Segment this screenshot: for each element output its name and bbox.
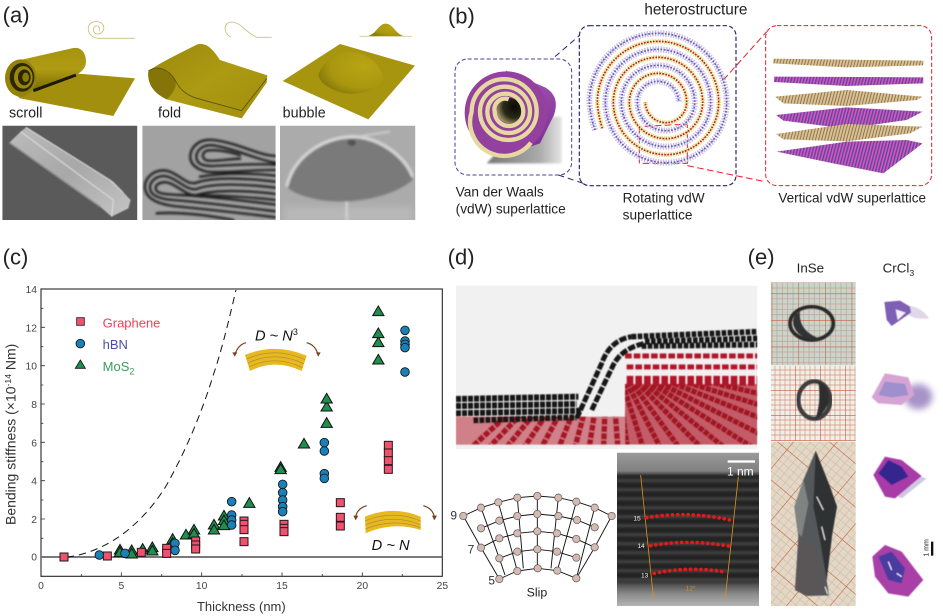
panel (c): bending stiffness chart bbox=[3, 244, 448, 614]
data: MoS2 triangles bbox=[114, 306, 384, 558]
photo: InSe shard on grid bbox=[771, 442, 856, 606]
y axis tick labels: 10 bbox=[25, 362, 37, 373]
y axis tick labels: 8 bbox=[31, 400, 37, 411]
photo: InSe ring on grid bbox=[771, 282, 856, 365]
caption: rotating vdW superlattice: superlattice bbox=[623, 207, 693, 222]
red base layer bbox=[456, 416, 626, 446]
black ramp bbox=[577, 337, 645, 418]
y axis title: Nm) bbox=[3, 344, 19, 374]
3D model: scroll bbox=[5, 48, 135, 116]
illustration: vertical stacked layers bbox=[773, 59, 923, 173]
legend: MoS2 bbox=[75, 359, 134, 376]
photo: TEM of fold bbox=[142, 126, 276, 220]
scale bar: 1 mm: 1 mm bbox=[923, 539, 930, 557]
lattice bonds bbox=[463, 496, 612, 579]
icon: scroll profile bbox=[88, 22, 135, 38]
legend: graphene: Graphene bbox=[103, 315, 160, 330]
panel (a): scroll, fold, bubble bbox=[2, 3, 415, 223]
caption: rotating vdW superlattice bbox=[623, 190, 705, 222]
crystal: CrCl3 sample 4 bbox=[872, 545, 923, 597]
column heading: CrCl3: 3 bbox=[909, 268, 914, 278]
label (d): (d) bbox=[448, 244, 475, 269]
3D model: bubble bbox=[283, 44, 415, 119]
y axis tick labels: 6 bbox=[31, 438, 37, 449]
connector: blue dashes between first and second box bbox=[555, 35, 583, 183]
caption: vertical vdW superlattice: Vertical vdW superlattice bbox=[778, 190, 926, 205]
x axis tick labels: 20 bbox=[357, 581, 368, 592]
black flat layers bbox=[456, 397, 582, 420]
scale bar label: 1 nm bbox=[727, 464, 754, 478]
illustration: rolled superlattice bbox=[465, 71, 562, 163]
photo: InSe loop on grid bbox=[771, 366, 856, 441]
diagram: slip lattice bbox=[450, 492, 615, 600]
layer numbers: 7 bbox=[468, 543, 475, 557]
y axis tick labels: 12 bbox=[25, 323, 37, 334]
red atom rows bbox=[647, 515, 730, 573]
red block fan bbox=[624, 383, 758, 446]
annotation: D ~ N with bent band bbox=[353, 506, 437, 554]
caption: van der Waals superlattice: (vdW) superlattice bbox=[456, 201, 566, 216]
purple-blue layer spiral bbox=[589, 33, 727, 163]
photo: SEM of bubble bbox=[280, 126, 415, 223]
caption: fold: fold bbox=[158, 105, 181, 121]
y axis title: Bending stiffness (×10 bbox=[3, 386, 19, 525]
label (c): (c) bbox=[3, 244, 28, 269]
red-yellow layer spiral bbox=[597, 41, 719, 155]
y axis tick labels bbox=[25, 285, 37, 564]
dashed curve: cubic scaling bbox=[67, 290, 236, 557]
x axis tick labels: 15 bbox=[276, 581, 288, 592]
dashed box: vdW superlattice bbox=[455, 59, 572, 175]
plot frame and ticks bbox=[41, 289, 442, 576]
connector: red dashes and selection region bbox=[639, 32, 767, 182]
dashed box: vertical superlattice bbox=[766, 26, 932, 186]
dashed box: rotating superlattice bbox=[579, 26, 736, 186]
3D model: fold bbox=[148, 44, 267, 118]
row numbers: 13 bbox=[641, 572, 649, 579]
illustration: rotating vdW spiral bbox=[589, 33, 727, 163]
crystal: CrCl3 sample 1 bbox=[884, 301, 929, 326]
caption: van der Waals superlattice bbox=[456, 185, 566, 216]
label (a): (a) bbox=[3, 3, 30, 28]
y axis title: -14 bbox=[3, 374, 13, 386]
caption: slip: Slip bbox=[527, 586, 547, 600]
y axis tick labels: 4 bbox=[31, 477, 37, 488]
red upper rows bbox=[625, 356, 757, 383]
x axis tick labels: 10 bbox=[196, 581, 208, 592]
panel (d): slip in layered materials bbox=[448, 244, 765, 606]
y axis tick labels: 14 bbox=[25, 285, 37, 296]
angle label: 12° bbox=[686, 585, 696, 593]
scale bar: 1 mm bbox=[923, 539, 933, 557]
annotation: D ~ N cubed with bent band: D ~ N bbox=[255, 328, 293, 344]
layer numbers: 9 bbox=[450, 508, 457, 522]
x axis tick labels bbox=[38, 581, 448, 592]
annotation: D ~ N cubed with bent band: 3 bbox=[293, 327, 298, 337]
caption: rotating vdW superlattice: Rotating vdW bbox=[623, 190, 705, 205]
black top layers bbox=[632, 332, 757, 346]
icon: bubble profile bbox=[359, 24, 412, 36]
lattice atoms bbox=[460, 492, 615, 583]
legend: hBN: hBN bbox=[103, 337, 128, 352]
caption: van der Waals superlattice: Van der Waals bbox=[456, 185, 544, 200]
column heading: InSe: InSe bbox=[797, 261, 824, 276]
layer numbers: 5 bbox=[488, 574, 495, 588]
micrograph: curved layers bbox=[617, 453, 759, 606]
legend: MoS2: MoS bbox=[103, 359, 129, 374]
y axis tick labels: 0 bbox=[31, 553, 37, 564]
crystal: CrCl3 sample 3 bbox=[873, 457, 927, 498]
label (b): (b) bbox=[448, 3, 475, 28]
x axis tick labels: 5 bbox=[118, 581, 124, 592]
photo: SEM of scroll bbox=[2, 126, 137, 220]
legend: MoS2: 2 bbox=[129, 366, 134, 376]
heading: heterostructure: heterostructure bbox=[644, 1, 747, 18]
row numbers: 15 bbox=[633, 515, 641, 522]
column heading: CrCl3: CrCl bbox=[883, 261, 909, 276]
data: hBN circles bbox=[95, 326, 409, 559]
layer numbers bbox=[450, 508, 495, 588]
panel (b): van der Waals superlattice bbox=[448, 1, 932, 222]
annotation: D ~ N cubed with bent band bbox=[232, 327, 321, 371]
panel (e): InSe and CrCl3 photos bbox=[748, 244, 933, 606]
label (e): (e) bbox=[748, 244, 775, 269]
x axis title: Thickness (nm) bbox=[197, 599, 286, 614]
caption: bubble: bubble bbox=[283, 105, 326, 121]
scale bar bbox=[728, 460, 755, 463]
row numbers bbox=[633, 515, 649, 579]
legend bbox=[75, 315, 160, 376]
x axis tick labels: 25 bbox=[437, 581, 448, 592]
y axis tick labels: 2 bbox=[31, 515, 37, 526]
data: graphene squares bbox=[60, 441, 392, 561]
zero baseline bbox=[41, 554, 442, 559]
x axis tick labels: 0 bbox=[38, 581, 44, 592]
caption: scroll: scroll bbox=[9, 105, 42, 121]
icon: fold profile bbox=[225, 22, 272, 37]
crystal: CrCl3 sample 2 bbox=[872, 373, 932, 409]
simulation: kink of atomic layers bbox=[456, 286, 765, 453]
row numbers: 14 bbox=[637, 543, 645, 550]
annotation: D ~ N with bent band: D ~ N bbox=[372, 538, 410, 554]
